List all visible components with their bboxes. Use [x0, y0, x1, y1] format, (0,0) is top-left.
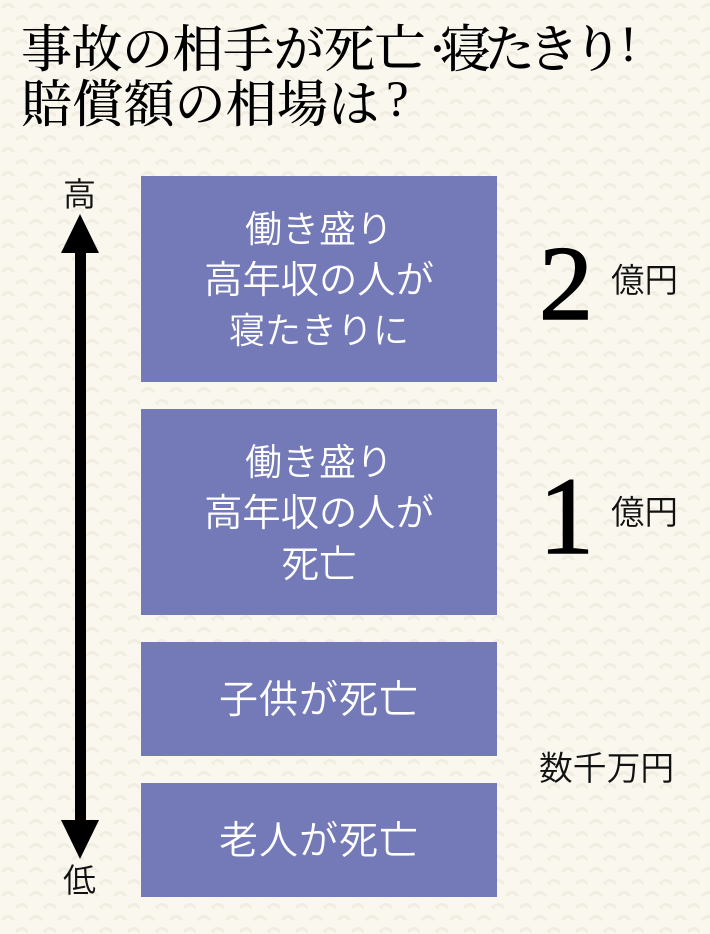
arrow: high to low scale: [61, 214, 99, 859]
unit: oku yen: 億円: [611, 263, 678, 300]
panel: high earner death: 高年収の人が: [204, 492, 434, 535]
panel: child death: [141, 642, 497, 756]
panel: high earner death: [141, 409, 497, 615]
title: 賠償額の相場は: [21, 63, 379, 137]
axis label: low: 低: [63, 862, 96, 899]
numeral 1: 1: [539, 455, 594, 577]
axis label: high: 高: [63, 176, 96, 213]
panel: elderly death: 老人が死亡: [219, 820, 419, 863]
title: !: [620, 17, 637, 73]
panel: high earner bedridden: 寝たきりに: [229, 310, 409, 351]
panel: high earner death: 死亡: [282, 543, 356, 585]
panel: high earner bedridden: [141, 176, 497, 382]
title: [21, 8, 637, 137]
panel: child death: 子供が死亡: [219, 679, 419, 722]
panel: high earner bedridden: 高年収の人が: [204, 259, 434, 302]
panel: elderly death: [141, 783, 497, 897]
title: ?: [386, 72, 409, 128]
amount: tens of millions of yen: 数千万円: [539, 750, 674, 788]
title: 寝たきり: [440, 8, 616, 82]
numeral 2: 2: [539, 225, 593, 342]
amount: 2 oku yen: [539, 225, 678, 342]
title: 事故の相手が死亡: [21, 8, 425, 82]
amount: 1 oku yen: [539, 455, 678, 577]
panel: high earner bedridden: 働き盛り: [245, 209, 393, 250]
panel: high earner death: 働き盛り: [245, 442, 393, 483]
unit: oku yen: 億円: [611, 495, 678, 532]
title: ·: [429, 8, 446, 82]
